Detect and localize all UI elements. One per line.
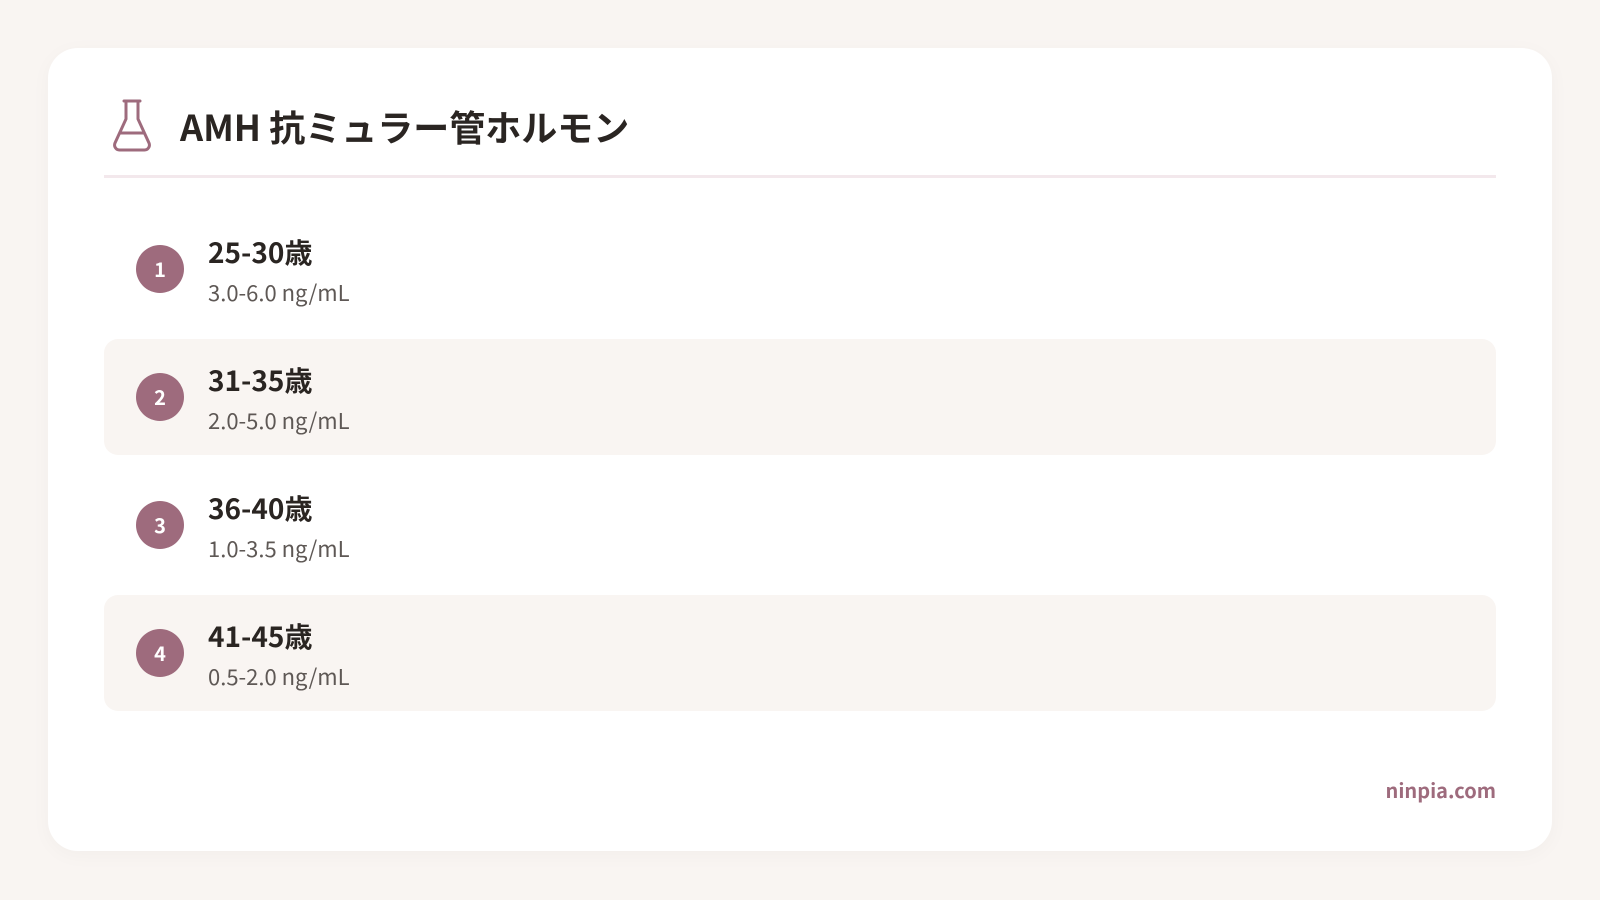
row 4: 0.5-2.0 ng/mL	[208, 660, 350, 692]
row 3	[136, 488, 350, 564]
row 4	[104, 595, 1496, 711]
row 2: 2.0-5.0 ng/mL	[208, 404, 350, 436]
heading: AMH 抗ミュラー管ホルモン	[180, 100, 629, 152]
row 2: 31-35歳	[208, 360, 312, 400]
row 1: 1	[154, 254, 166, 283]
icon: flask	[113, 100, 151, 152]
row 1	[136, 232, 350, 308]
row 3: 36-40歳	[208, 488, 312, 528]
row 2: 2	[154, 382, 166, 411]
row 4: 41-45歳	[208, 616, 312, 656]
title	[113, 100, 629, 152]
row 3: 1.0-3.5 ng/mL	[208, 532, 350, 564]
row 1: 25-30歳	[208, 232, 312, 272]
row 1: 3.0-6.0 ng/mL	[208, 276, 350, 308]
footer: ninpia.com	[1386, 775, 1496, 804]
row 4: 4	[154, 638, 166, 667]
row 3: 3	[154, 510, 166, 539]
row 2	[104, 339, 1496, 455]
